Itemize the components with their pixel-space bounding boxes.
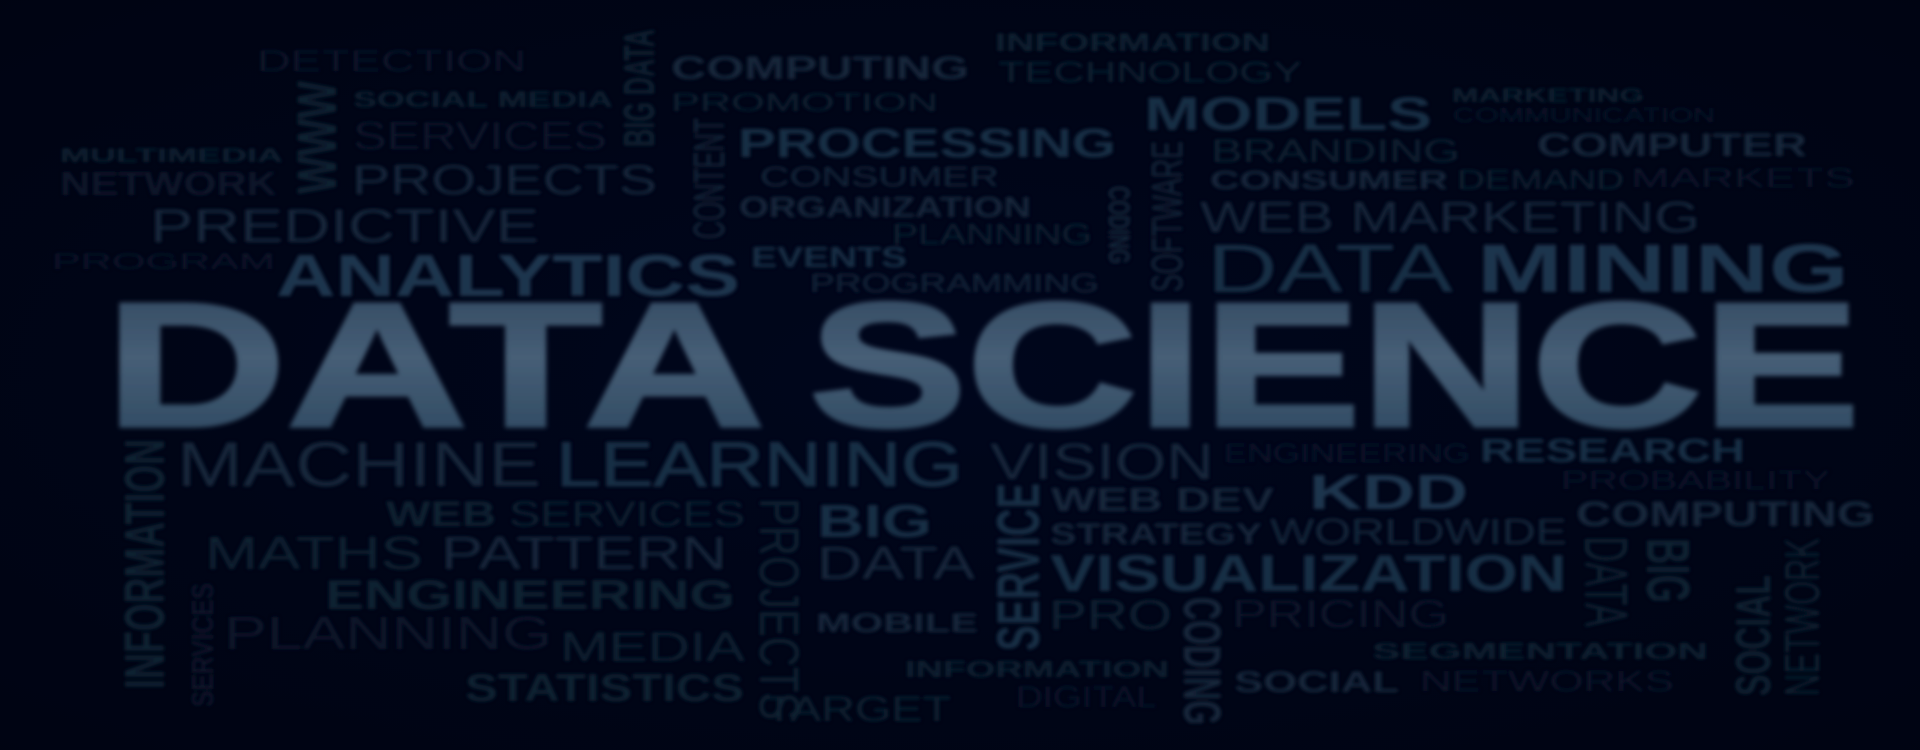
- word: MULTIMEDIA: MULTIMEDIA: [60, 146, 284, 167]
- word: INFORMATION vertical: INFORMATION: [113, 439, 177, 689]
- word: LEARNING: LEARNING: [556, 430, 963, 500]
- word: WWW vertical: WWW: [285, 81, 348, 194]
- word: CODING vertical upper: CODING: [1102, 186, 1135, 264]
- word: BIG vertical: BIG: [1634, 538, 1702, 603]
- word: MINING: MINING: [1477, 230, 1849, 307]
- word: NETWORK: NETWORK: [60, 165, 277, 202]
- word: STRATEGY: STRATEGY: [1050, 518, 1262, 551]
- word: STATISTICS: STATISTICS: [465, 667, 744, 710]
- word: CONSUMER bold: CONSUMER: [1210, 165, 1448, 195]
- word: PRICING: PRICING: [1232, 593, 1449, 636]
- word: WORLDWIDE: WORLDWIDE: [1270, 511, 1567, 552]
- word: EVENTS: EVENTS: [751, 242, 907, 274]
- word: MARKETS: MARKETS: [1631, 163, 1855, 193]
- word: INFORMATION: INFORMATION: [905, 656, 1169, 682]
- word: PLANNING: PLANNING: [892, 219, 1092, 251]
- word: RESEARCH: RESEARCH: [1480, 432, 1745, 469]
- word: ENGINEERING: ENGINEERING: [325, 571, 735, 618]
- word: PATTERN: PATTERN: [441, 527, 727, 579]
- word: TECHNOLOGY: TECHNOLOGY: [998, 57, 1302, 89]
- word: WEB DEV: WEB DEV: [1051, 481, 1274, 518]
- word: ENGINEERING: ENGINEERING: [1224, 438, 1470, 468]
- word: MODELS: MODELS: [1144, 87, 1432, 140]
- word: KDD: KDD: [1309, 466, 1468, 520]
- word: TARGET: TARGET: [765, 690, 951, 729]
- word: MOBILE: MOBILE: [816, 608, 978, 638]
- word: WEB MARKETING: WEB MARKETING: [1200, 193, 1700, 242]
- word: PROGRAM: PROGRAM: [52, 249, 275, 274]
- word: PROBABILITY: PROBABILITY: [1561, 465, 1830, 495]
- word: MARKETING: MARKETING: [1452, 86, 1644, 107]
- word: BRANDING: BRANDING: [1211, 133, 1460, 169]
- title: DATA SCIENCE: DATA: [105, 266, 765, 464]
- word: MACHINE: MACHINE: [177, 430, 541, 500]
- word: PRO: PRO: [1049, 591, 1172, 638]
- word: SEGMENTATION: SEGMENTATION: [1372, 638, 1708, 664]
- word: SERVICES: SERVICES: [509, 495, 745, 534]
- word: PROJECTS: PROJECTS: [352, 156, 657, 203]
- title: DATA SCIENCE: [105, 266, 1860, 464]
- word: PREDICTIVE: PREDICTIVE: [150, 199, 539, 252]
- word: SERVICES: SERVICES: [353, 115, 607, 158]
- word: SOCIAL vertical: SOCIAL: [1727, 575, 1781, 696]
- words above the title: [52, 29, 1855, 309]
- word: NETWORKS: NETWORKS: [1420, 666, 1674, 698]
- word: DATA vertical: DATA: [1572, 536, 1640, 627]
- word: INFORMATION: INFORMATION: [995, 29, 1270, 57]
- word: ORGANIZATION: ORGANIZATION: [739, 192, 1031, 224]
- word: PROCESSING: PROCESSING: [738, 120, 1116, 166]
- word: PROGRAMMING: PROGRAMMING: [810, 268, 1099, 298]
- word: NETWORK vertical: NETWORK: [1776, 538, 1830, 696]
- word: PLANNING: PLANNING: [224, 607, 552, 659]
- word: SERVICE vertical: SERVICE: [985, 483, 1052, 651]
- word: MATHS: MATHS: [205, 527, 423, 579]
- word: SOCIAL MEDIA: SOCIAL MEDIA: [353, 87, 613, 112]
- title: DATA SCIENCE: SCIENCE: [809, 266, 1860, 464]
- word: COMPUTING: COMPUTING: [671, 50, 969, 86]
- word: CONSUMER: CONSUMER: [760, 161, 999, 192]
- word: DETECTION: DETECTION: [257, 45, 526, 78]
- words below the title: [113, 430, 1875, 729]
- word: COMPUTER: COMPUTER: [1537, 127, 1807, 163]
- word: DEMAND: DEMAND: [1457, 164, 1624, 195]
- word: CONTENT vertical: CONTENT: [685, 118, 734, 239]
- word: WEB: WEB: [386, 495, 496, 534]
- word: MEDIA: MEDIA: [560, 623, 745, 670]
- word: VISUALIZATION: VISUALIZATION: [1050, 545, 1567, 603]
- word: SERVICES vertical: SERVICES: [185, 583, 220, 707]
- word: COMPUTING: COMPUTING: [1576, 495, 1875, 534]
- word: ANALYTICS: ANALYTICS: [276, 243, 740, 309]
- word: COMMUNICATION: COMMUNICATION: [1453, 105, 1715, 127]
- word: BIG: BIG: [817, 495, 932, 547]
- word: DIGITAL: DIGITAL: [1016, 681, 1157, 714]
- word: DATA: DATA: [817, 537, 975, 589]
- word: DATA thin: DATA: [1207, 230, 1453, 307]
- word: SOCIAL: SOCIAL: [1234, 666, 1399, 699]
- word: PROMOTION: PROMOTION: [671, 89, 938, 117]
- word: SOFTWARE vertical: SOFTWARE: [1143, 141, 1192, 292]
- word: VISION: VISION: [990, 433, 1214, 490]
